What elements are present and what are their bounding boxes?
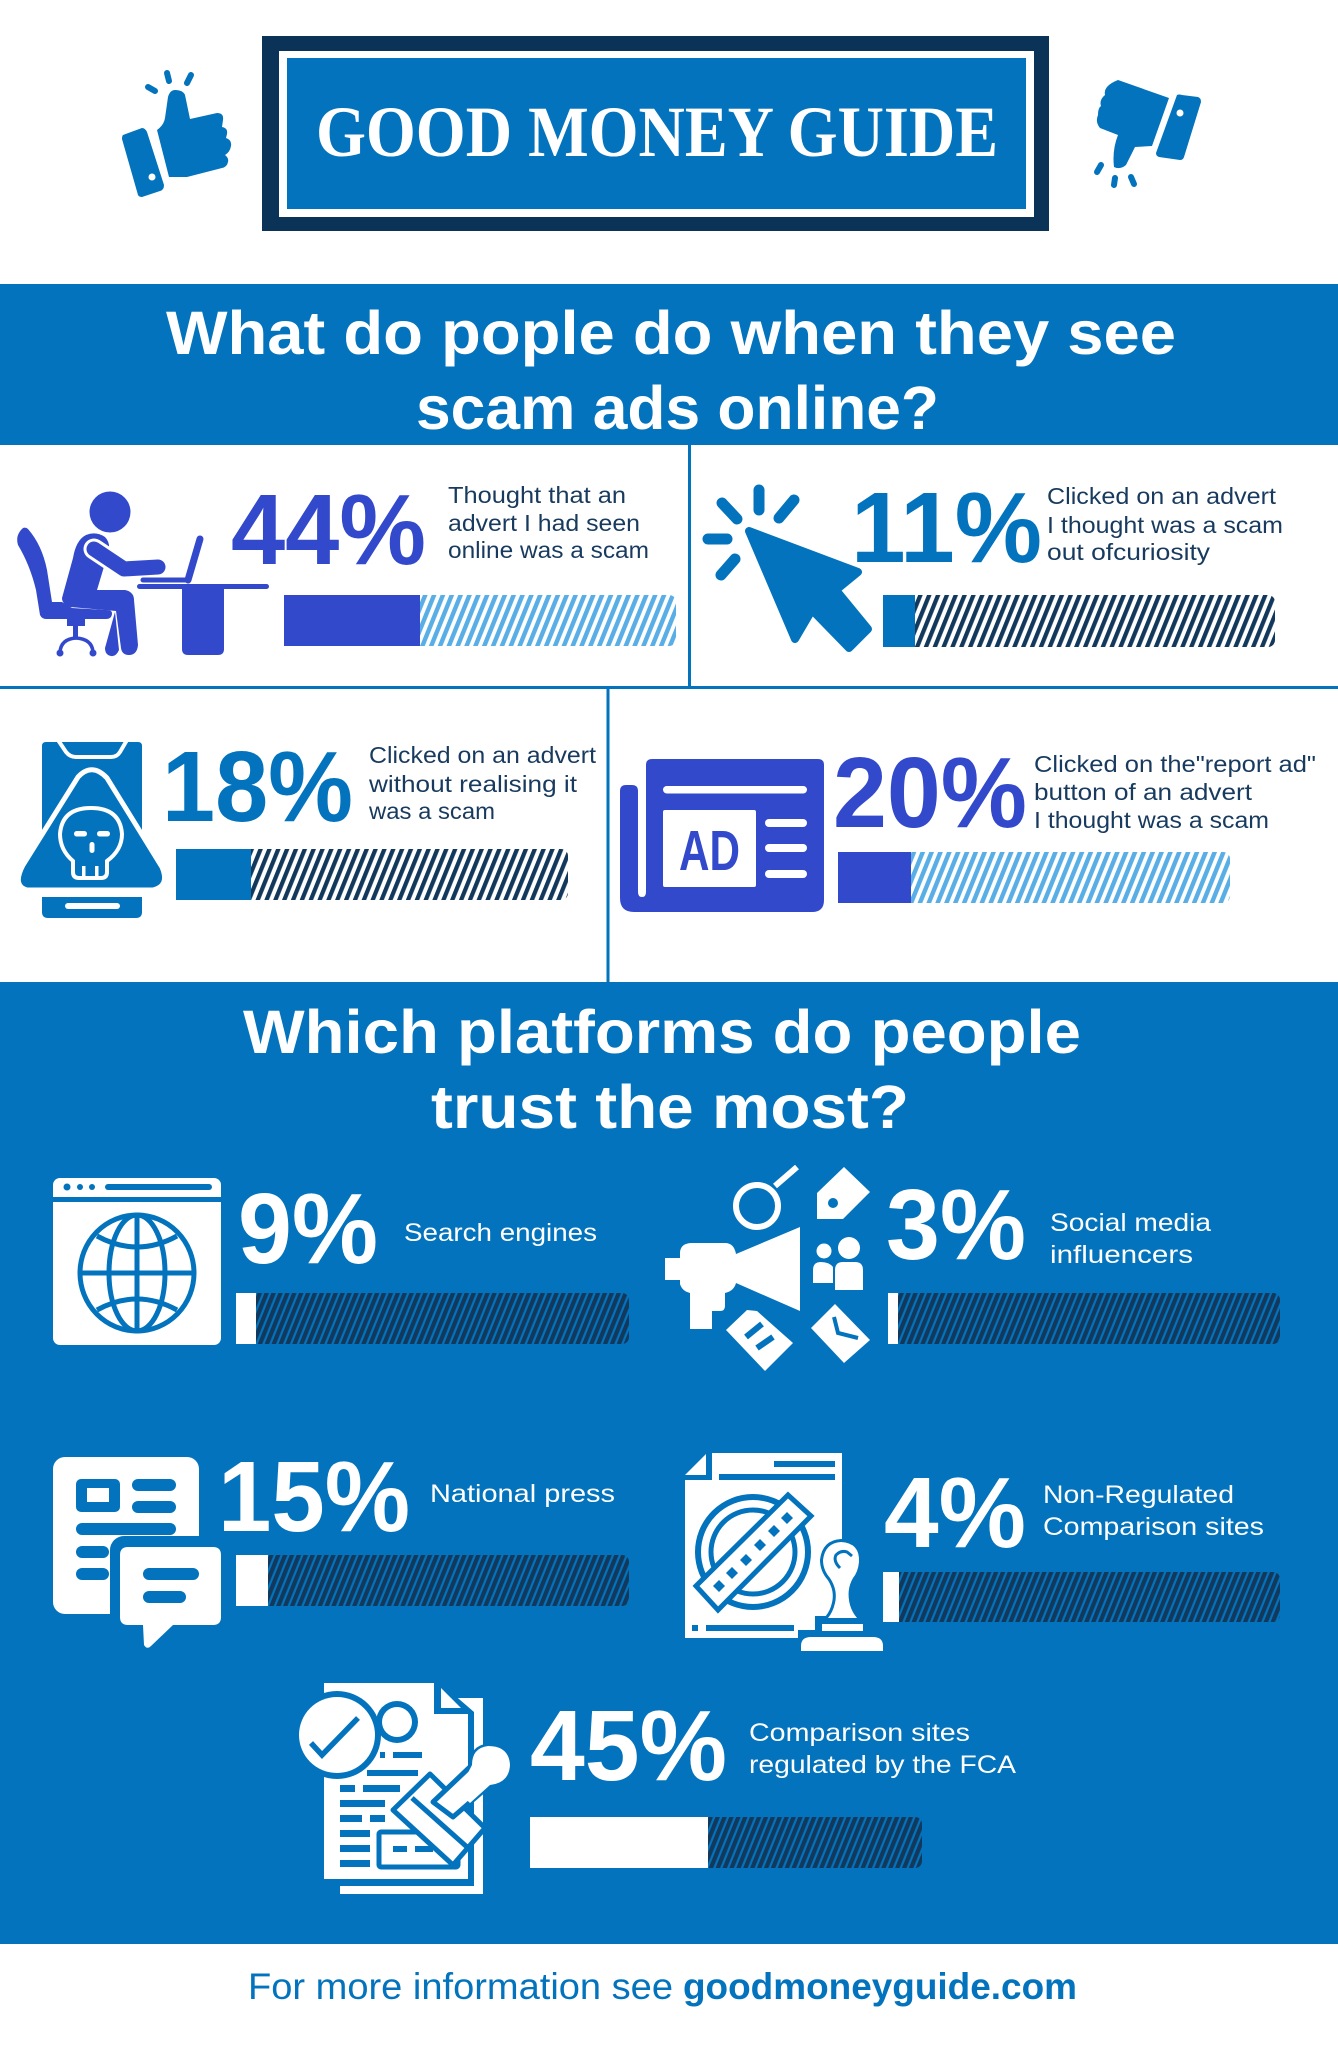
description: clicked out of curiosity bbox=[1047, 483, 1283, 565]
stat: 3%: 3% bbox=[886, 1169, 1026, 1281]
description: thought it was a scam: online was a scam bbox=[448, 537, 649, 563]
description: clicked out of curiosity: I thought was a scam bbox=[1047, 512, 1283, 538]
item: regulated comparison sites 45% bbox=[293, 1680, 1016, 1894]
bar: 15% bbox=[236, 1555, 629, 1606]
description: clicked without realising: Clicked on an advert bbox=[369, 742, 597, 768]
icon: thumbs down bbox=[1097, 80, 1201, 185]
footer: source bbox=[248, 1966, 1077, 2007]
icon: newspaper ad bbox=[620, 759, 824, 912]
logo: Good Money Guide bbox=[262, 36, 1049, 231]
panel: first section heading bbox=[0, 284, 1338, 445]
bar: 11% bbox=[883, 595, 1275, 647]
logo: Good Money Guide: GOOD MONEY GUIDE bbox=[316, 92, 998, 172]
bar: 20% bbox=[838, 852, 1230, 903]
label: comparison sites regulated by the FCA: regulated by the FCA bbox=[749, 1751, 1016, 1779]
panel: 20 percent bbox=[620, 737, 1316, 912]
description: clicked out of curiosity: out ofcuriosity bbox=[1047, 539, 1211, 565]
description: thought it was a scam: advert I had seen bbox=[448, 510, 640, 536]
description: thought it was a scam: Thought that an bbox=[448, 482, 626, 508]
bar: 45% bbox=[530, 1817, 922, 1868]
item: national press 15% bbox=[53, 1441, 629, 1648]
panel: which platforms bbox=[0, 982, 1338, 1944]
panel: 18 percent bbox=[18, 731, 597, 918]
description: clicked report ad: button of an advert bbox=[1034, 779, 1253, 805]
bar: 4% bbox=[883, 1572, 1280, 1622]
icon: thumbs up bbox=[122, 73, 231, 197]
description: thought it was a scam bbox=[448, 482, 649, 563]
icon: browser globe bbox=[53, 1178, 221, 1345]
heading: what do people do: scam ads online? bbox=[416, 374, 939, 442]
label: non-regulated comparison sites bbox=[1043, 1481, 1264, 1541]
description: clicked out of curiosity: Clicked on an advert bbox=[1047, 483, 1277, 509]
bar: 18% bbox=[176, 849, 568, 900]
heading: which platforms do people trust: Which platforms do people bbox=[243, 998, 1081, 1066]
stat: 4%: 4% bbox=[884, 1457, 1026, 1569]
label: social media influencers: influencers bbox=[1050, 1241, 1193, 1269]
icon: phone with skull warning bbox=[18, 740, 165, 918]
stat: 9%: 9% bbox=[238, 1173, 378, 1285]
label: social media influencers: Social media bbox=[1050, 1209, 1211, 1237]
description: clicked report ad bbox=[1034, 751, 1316, 833]
item: non-regulated comparison sites 4% bbox=[685, 1453, 1280, 1651]
item: search engines 9% bbox=[53, 1173, 629, 1345]
heading: which platforms do people trust bbox=[243, 998, 1081, 1141]
label: national press: National press bbox=[430, 1480, 615, 1508]
icon text: AD: AD bbox=[679, 819, 740, 883]
description: clicked without realising: was a scam bbox=[368, 798, 495, 824]
description: clicked without realising bbox=[368, 742, 597, 824]
icon: mouse cursor clicking bbox=[708, 490, 868, 648]
description: clicked report ad: I thought was a scam bbox=[1034, 807, 1269, 833]
icon: rejected document with stamp bbox=[685, 1453, 883, 1651]
stat: 18%: 18% bbox=[162, 731, 353, 843]
item: social media influencers 3% bbox=[665, 1167, 1280, 1371]
footer: source: goodmoneyguide.com bbox=[683, 1966, 1077, 2007]
description: clicked report ad: Clicked on the"report ad" bbox=[1034, 751, 1316, 777]
stat: 45%: 45% bbox=[530, 1690, 727, 1802]
footer: source: For more information see bbox=[248, 1966, 673, 2007]
icon: news document with speech bubble bbox=[53, 1457, 229, 1648]
icon: megaphone and tags bbox=[665, 1167, 870, 1371]
stat: 44%: 44% bbox=[231, 474, 426, 586]
label: non-regulated comparison sites: Comparison sites bbox=[1043, 1513, 1264, 1541]
bar: 44% bbox=[284, 595, 676, 646]
label: non-regulated comparison sites: Non-Regulated bbox=[1043, 1481, 1234, 1509]
bar: 3% bbox=[888, 1293, 1280, 1344]
icon: approved document with stamp bbox=[293, 1680, 510, 1894]
stat: 20%: 20% bbox=[833, 737, 1027, 849]
label: comparison sites regulated by the FCA: Comparison sites bbox=[749, 1719, 970, 1747]
description: clicked without realising: without realising it bbox=[368, 771, 578, 797]
label: search engines: Search engines bbox=[404, 1219, 597, 1247]
heading: what do people do bbox=[166, 299, 1176, 442]
panel: 11 percent bbox=[708, 472, 1283, 648]
bar: 9% bbox=[236, 1293, 629, 1344]
stat: 11%: 11% bbox=[851, 472, 1042, 584]
stat: 15%: 15% bbox=[218, 1441, 410, 1553]
label: social media influencers bbox=[1050, 1209, 1211, 1269]
icon: person at desk bbox=[17, 492, 269, 656]
heading: which platforms do people trust: trust the most? bbox=[431, 1073, 909, 1141]
label: comparison sites regulated by the FCA bbox=[749, 1719, 1016, 1779]
panel: 44 percent bbox=[17, 474, 676, 656]
heading: what do people do: What do pople do when they see bbox=[166, 299, 1176, 367]
grid dividers bbox=[0, 445, 1338, 983]
